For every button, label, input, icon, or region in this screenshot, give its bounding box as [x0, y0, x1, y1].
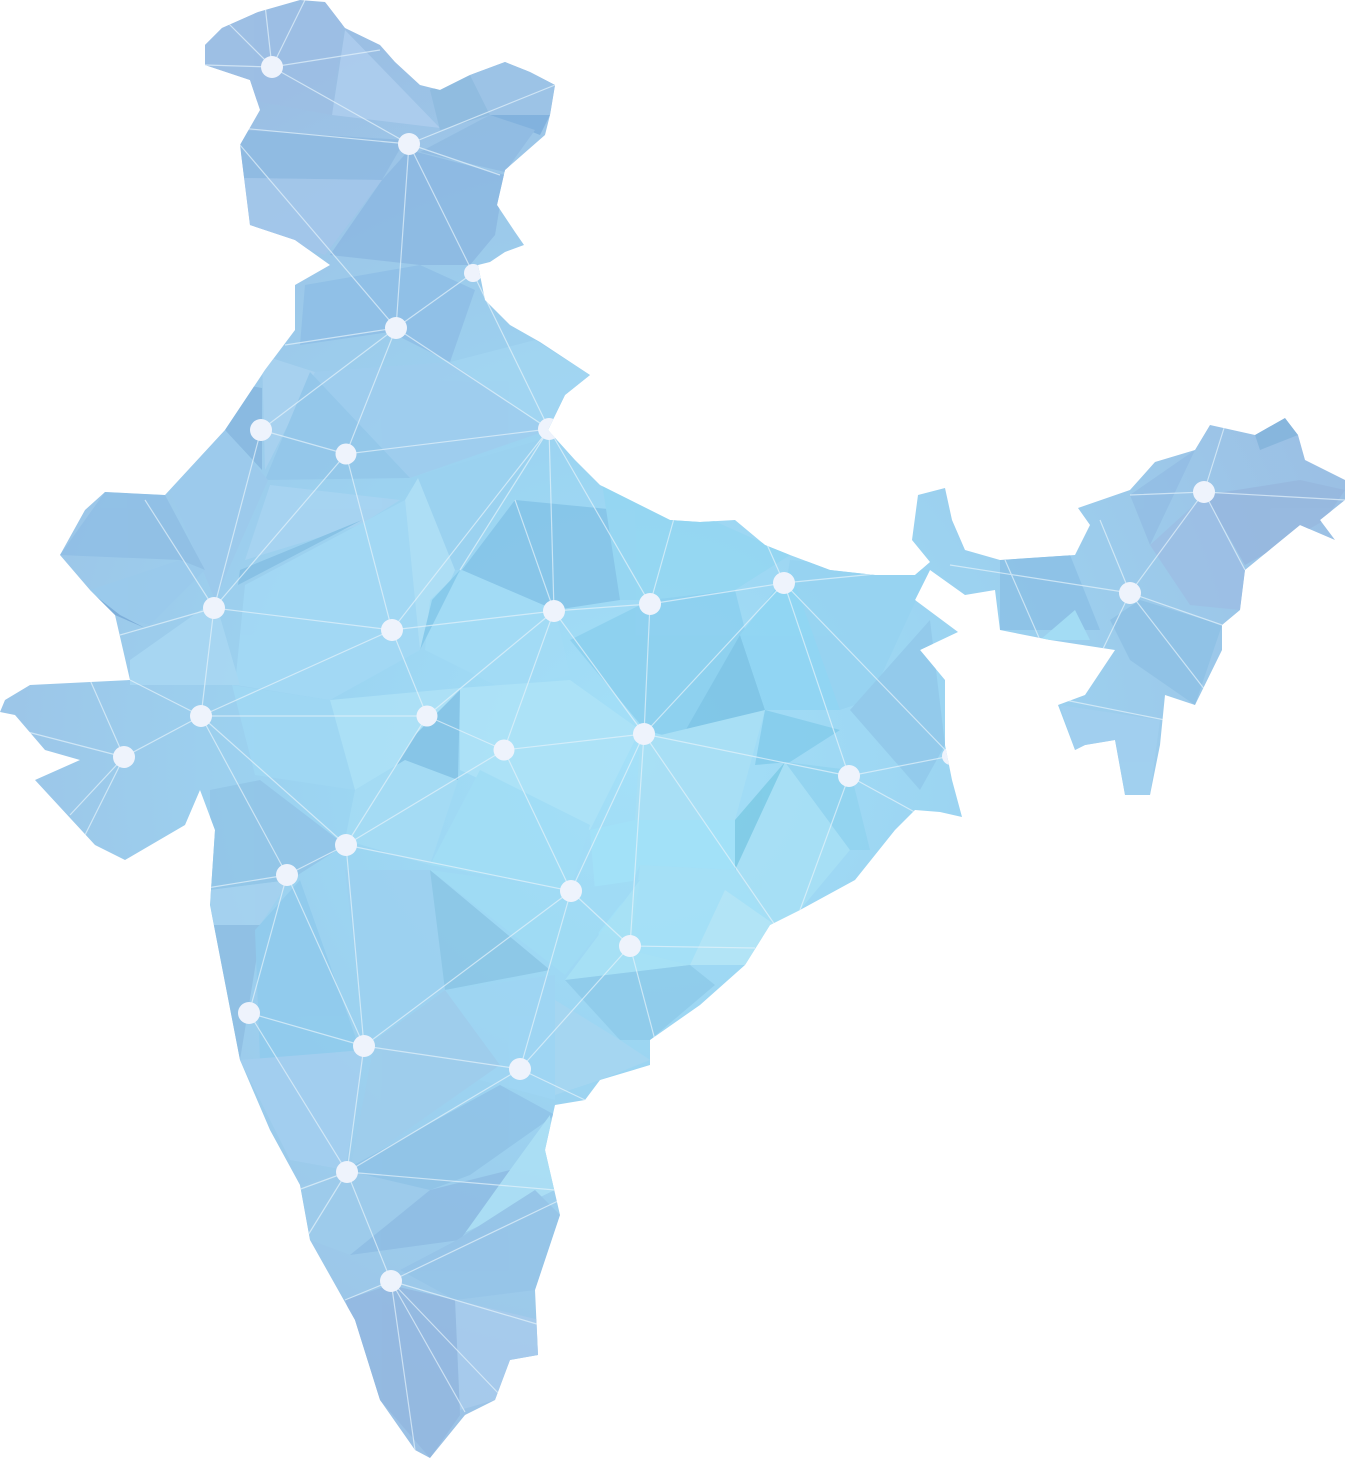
network nodes [113, 56, 1215, 1292]
